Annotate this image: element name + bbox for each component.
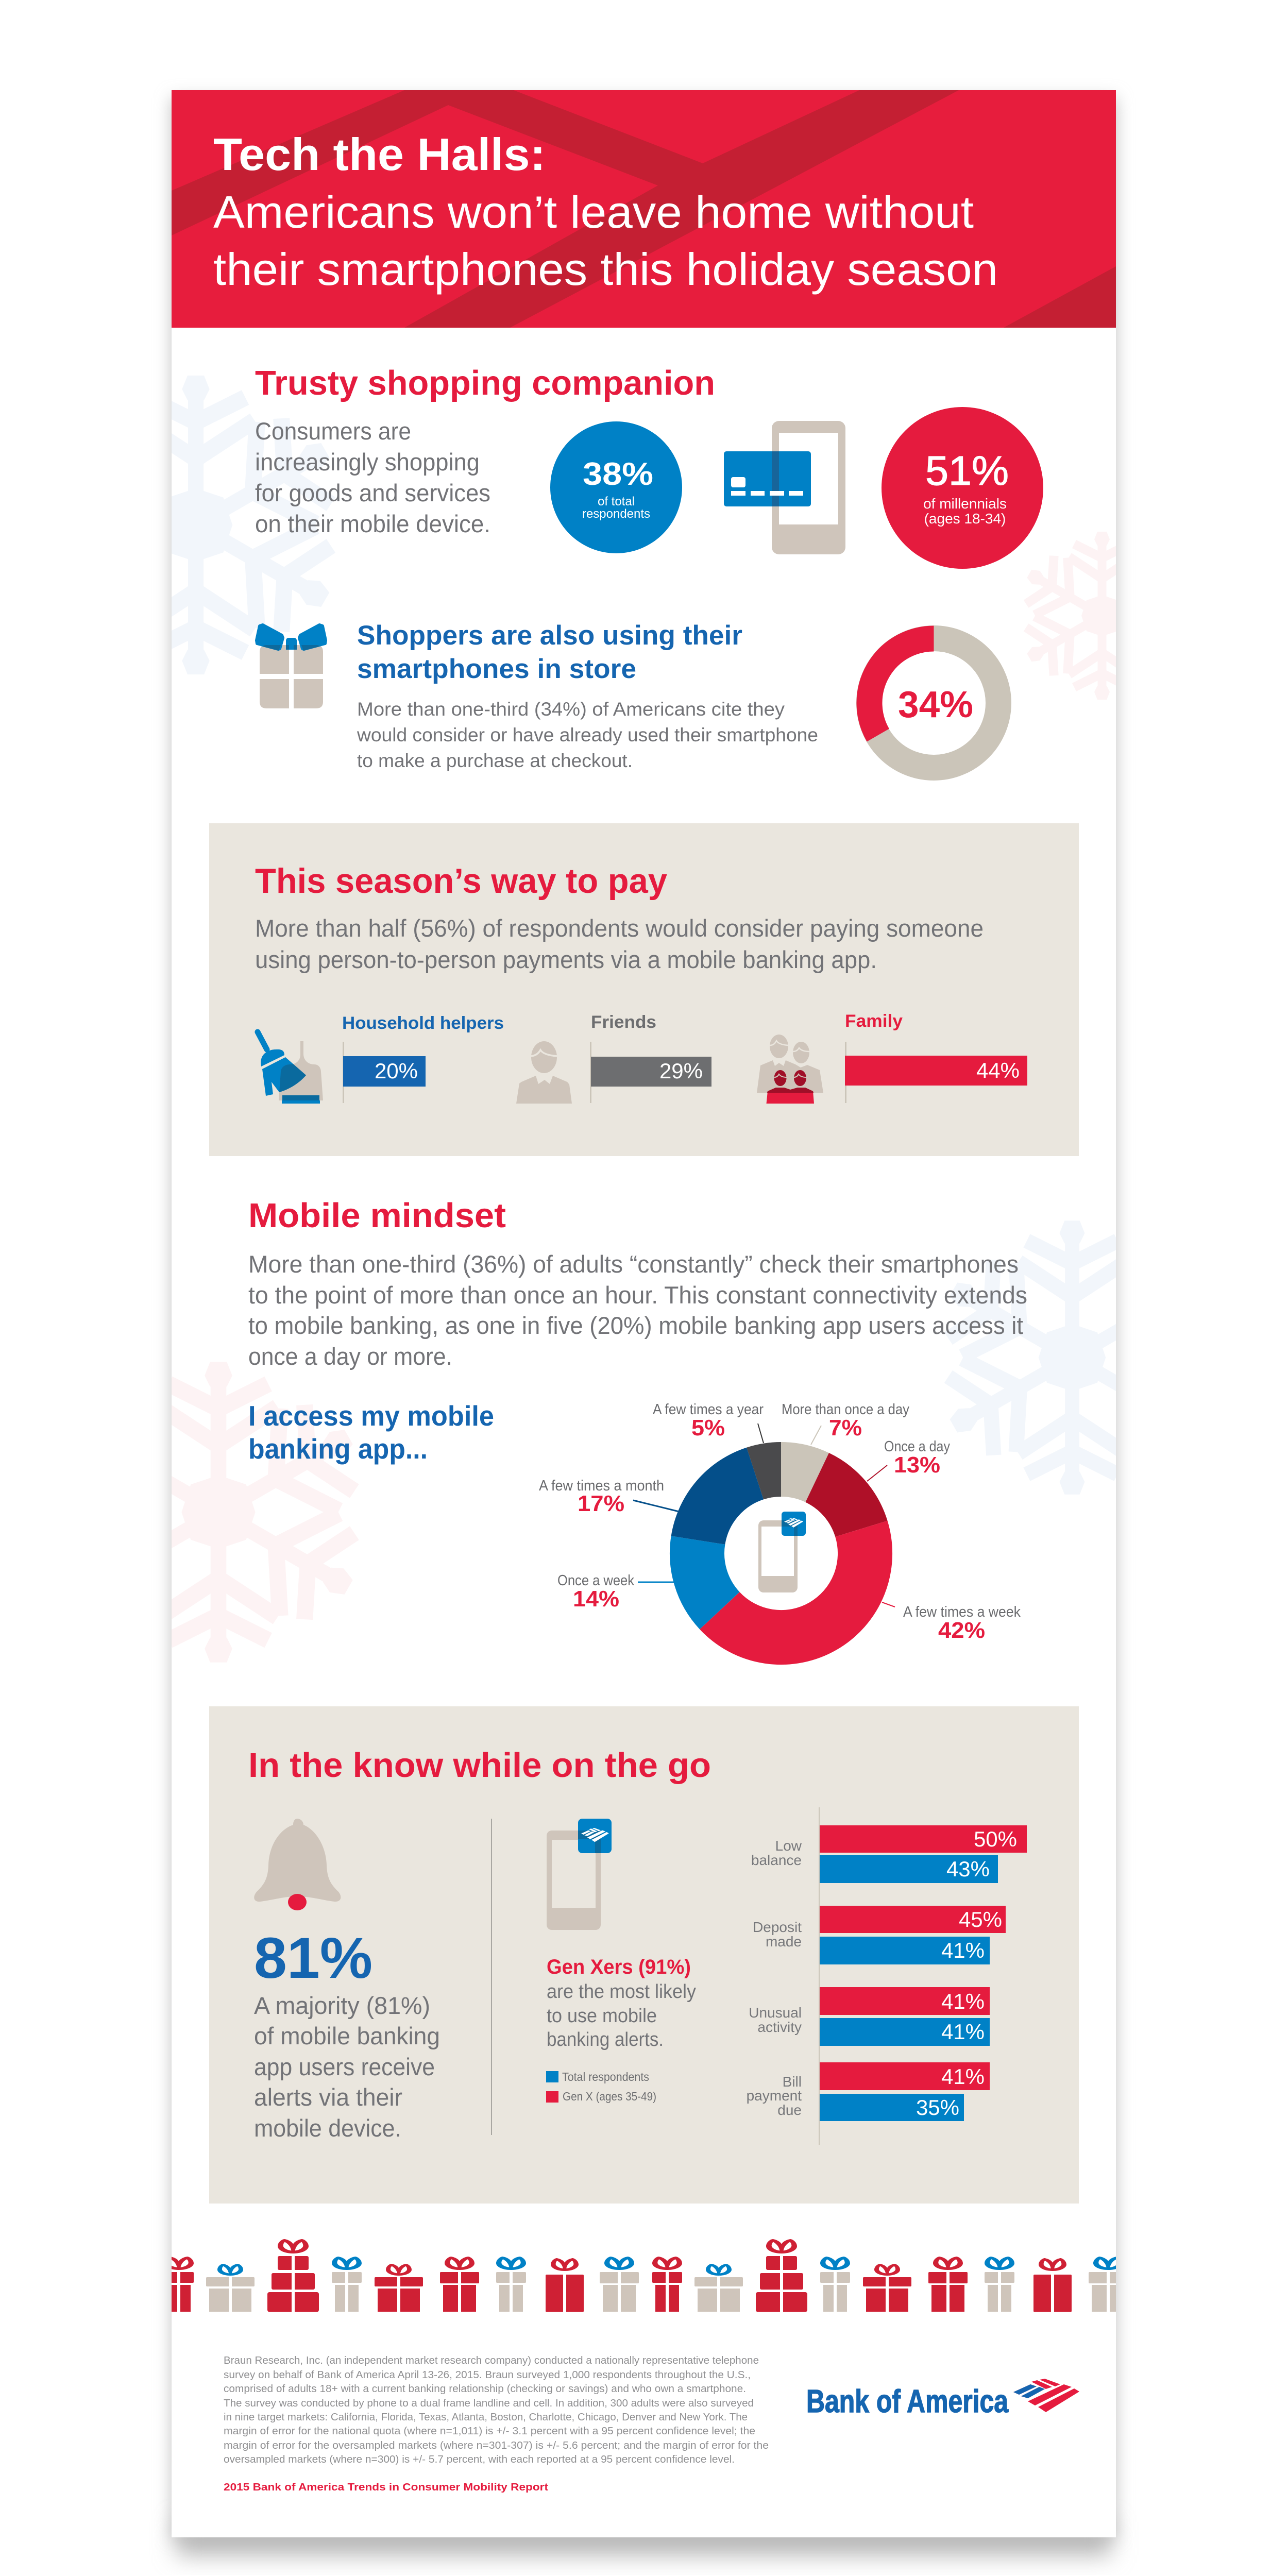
label: more than once a day 7%: More than once a day <box>782 1401 909 1418</box>
text: constantly check smartphones: once a day or more. <box>248 1343 452 1370</box>
bars: bill payment due: Bill <box>783 2074 802 2090</box>
bars: bill payment due: payment <box>747 2088 802 2104</box>
bars: unusual activity: activity <box>757 2019 802 2035</box>
heading: i access my mobile banking app: banking app... <box>248 1433 428 1465</box>
title: Tech the Halls: <box>213 129 546 180</box>
text: gen xers: to use mobile <box>547 2005 657 2027</box>
card drop shadow <box>172 98 1116 2555</box>
label: a few times a month 17%: A few times a month <box>539 1478 664 1494</box>
text: person-to-person payments: More than half (56%) of respondents would consider paying someone <box>255 914 984 942</box>
label: once a day 13% <box>867 1438 950 1481</box>
bars: bill payment due: 41% <box>941 2064 985 2089</box>
footnote: survey methodology: margin of error for the national quota (where n=1,011) is +/- 3.1 percent with a 95 percent confidence level; the <box>224 2426 755 2437</box>
text: majority receive alerts <box>254 1992 440 2142</box>
heading: shoppers in store <box>357 620 742 684</box>
label: a few times a month 17%: 17% <box>578 1491 624 1516</box>
stat circle: 38% of total respondents: respondents <box>582 507 650 521</box>
text: consumers shopping on mobile: on their mobile device. <box>255 510 490 537</box>
bars: bill payment due: 35% <box>916 2095 959 2120</box>
report citation: 2015 Bank of America Trends in Consumer Mobility Report <box>224 2482 548 2493</box>
stat circle: 51% of millennials <box>882 407 1043 569</box>
bars: deposit made: 41% <box>941 1938 985 1962</box>
icon: broom and dustpan <box>258 1032 323 1104</box>
text: one-third at checkout: would consider or have already used their smartphone <box>357 724 818 745</box>
decorative snowflakes <box>37 376 1217 1663</box>
text: consumers shopping on mobile: Consumers are <box>255 417 411 445</box>
footnote: survey methodology: in nine target markets: California, Florida, Texas, Atlanta, Boston, Charlotte, Chicago, Denver and New York. The <box>224 2412 748 2423</box>
label: more than once a day 7%: 7% <box>829 1415 862 1440</box>
footnote: survey methodology: oversampled markets (where n=300) is +/- 5.7 percent, with each reported at a 95 percent confidence level. <box>224 2454 735 2465</box>
text: person-to-person payments <box>255 914 984 973</box>
stat circle: 51% of millennials: 51% <box>925 448 1009 494</box>
text: majority receive alerts: A majority (81%) <box>254 1992 430 2019</box>
footnote: survey methodology: survey on behalf of Bank of America April 13-26, 2015. Braun surveyed 1,000 respondents throughout the U.S., <box>224 2369 751 2381</box>
stat circle: 51% of millennials: (ages 18-34) <box>924 511 1006 527</box>
card background <box>172 90 1116 2537</box>
donut chart: 34% <box>869 638 998 768</box>
label: once a week 14%: Once a week <box>557 1572 634 1589</box>
label: a few times a year 5%: A few times a year <box>653 1401 764 1418</box>
label: a few times a year 5%: 5% <box>691 1415 725 1440</box>
footnote: survey methodology: margin of error for the oversampled markets (where n=301-307) is +/- 5.6 percent; and the margin of error for the <box>224 2440 769 2451</box>
footnote: survey methodology: The survey was conducted by phone to a dual frame landline and cell. In addition, 300 adults were also surveyed <box>224 2398 754 2409</box>
legend: Total respondents <box>562 2070 649 2083</box>
label: a few times a week 42%: 42% <box>938 1618 985 1643</box>
stat circle: 38% of total respondents: of total <box>598 495 635 509</box>
heading: way to pay: This season’s way to pay <box>255 861 667 901</box>
bars: low balance <box>751 1825 1027 1883</box>
bars: unusual activity: 41% <box>941 1989 985 2013</box>
donut chart: banking app access frequency <box>697 1469 865 1637</box>
label: more than once a day 7% <box>782 1401 909 1445</box>
bar: household helpers 20% <box>342 1013 504 1103</box>
icon: bell <box>254 1819 341 1910</box>
bars: deposit made: 45% <box>959 1907 1002 1931</box>
text: majority receive alerts: app users receive <box>254 2053 435 2080</box>
bars: low balance: 50% <box>974 1827 1017 1851</box>
bars: deposit made: made <box>766 1934 802 1950</box>
bar: household helpers 20%: 20% <box>375 1059 418 1083</box>
bar: family 44% <box>845 1011 1027 1103</box>
stat circle: 38% of total respondents: 38% <box>583 456 653 492</box>
heading: shoppers in store: smartphones in store <box>357 654 636 684</box>
title <box>213 129 998 295</box>
bars: deposit made: Deposit <box>753 1919 802 1935</box>
stat circle: 38% of total respondents <box>550 421 682 553</box>
icon: family <box>757 1035 823 1104</box>
label: once a week 14% <box>557 1572 675 1612</box>
legend: Gen X (ages 35-49) <box>563 2090 656 2103</box>
icon: phone with banking app <box>547 1819 612 1930</box>
bars: deposit made <box>753 1906 1006 1964</box>
heading: shoppers in store: Shoppers are also using their <box>357 620 742 651</box>
footnote: survey methodology <box>224 2355 769 2465</box>
label: a few times a week 42% <box>882 1602 1021 1643</box>
icon: person <box>516 1041 572 1104</box>
legend <box>546 2070 656 2103</box>
text: majority receive alerts: of mobile banking <box>254 2022 440 2049</box>
bar: friends 29% <box>590 1012 711 1103</box>
bars: unusual activity: Unusual <box>749 2005 802 2021</box>
title: Americans won’t leave home without <box>213 187 974 238</box>
text: constantly check smartphones: to the point of more than once an hour. This constant connectivity extends <box>248 1281 1027 1309</box>
text: majority receive alerts: alerts via their <box>254 2083 402 2111</box>
heading: i access my mobile banking app: I access my mobile <box>248 1400 494 1432</box>
text: gen xers: Gen Xers (91%) <box>547 1956 691 1978</box>
text: gen xers <box>547 1956 696 2050</box>
bar: family 44%: Family <box>845 1011 903 1031</box>
heading: in the know: In the know while on the go <box>248 1746 711 1785</box>
bars: low balance: Low <box>775 1838 802 1854</box>
donut chart: 34%: 34% <box>898 684 973 725</box>
bar: friends 29%: 29% <box>659 1059 703 1083</box>
label: a few times a month 17% <box>539 1478 679 1516</box>
heading: i access my mobile banking app <box>248 1400 494 1465</box>
text: consumers shopping on mobile <box>255 417 490 537</box>
icon: phone with credit card <box>724 421 845 554</box>
text: constantly check smartphones <box>248 1250 1027 1370</box>
stat circle: 51% of millennials: of millennials <box>923 496 1007 512</box>
bars: low balance: balance <box>751 1852 802 1868</box>
bars: bill payment due <box>747 2062 990 2121</box>
text: person-to-person payments: using person-to-person payments via a mobile banking app. <box>255 946 877 973</box>
heading: trusty shopping companion: Trusty shopping companion <box>255 364 715 402</box>
label: once a day 13%: Once a day <box>884 1438 950 1455</box>
text: consumers shopping on mobile: for goods and services <box>255 479 490 506</box>
icon: gift <box>257 625 326 708</box>
bars: unusual activity <box>749 1987 990 2046</box>
icon: phone with app <box>758 1512 806 1592</box>
label: once a day 13%: 13% <box>894 1452 940 1478</box>
text: gen xers: banking alerts. <box>547 2029 664 2050</box>
bars: low balance: 43% <box>946 1857 990 1881</box>
text: one-third at checkout: More than one-third (34%) of Americans cite they <box>357 699 785 720</box>
text: one-third at checkout <box>357 699 818 771</box>
bars: bill payment due: due <box>777 2102 802 2118</box>
text: constantly check smartphones: More than one-third (36%) of adults “constantly” check their smartphones <box>248 1250 1019 1278</box>
label: a few times a week 42%: A few times a week <box>903 1604 1021 1620</box>
text: one-third at checkout: to make a purchase at checkout. <box>357 750 633 771</box>
footnote: survey methodology: Braun Research, Inc. (an independent market research company) conducted a nationally representative telephone <box>224 2355 759 2366</box>
title: their smartphones this holiday season <box>213 244 998 295</box>
row of gift icons <box>164 2239 1128 2313</box>
text: majority receive alerts: mobile device. <box>254 2114 401 2142</box>
header banner <box>172 90 1116 328</box>
footnote: survey methodology: comprised of adults 18+ with a current banking relationship (checking or savings) and who own a smartphone. <box>224 2383 746 2395</box>
heading: mobile mindset: Mobile mindset <box>248 1196 506 1235</box>
label: once a week 14%: 14% <box>573 1586 619 1612</box>
bar: family 44%: 44% <box>976 1058 1020 1082</box>
text: constantly check smartphones: to mobile banking, as one in five (20%) mobile banking app users access it <box>248 1312 1023 1339</box>
logo: bank of america: Bank of America <box>806 2384 1008 2419</box>
text: consumers shopping on mobile: increasingly shopping <box>255 448 480 476</box>
bar: friends 29%: Friends <box>591 1012 656 1032</box>
panel: this season's way to pay <box>209 823 1079 1156</box>
infographic canvas <box>160 89 1127 2569</box>
text: gen xers: are the most likely <box>547 1981 696 2003</box>
bars: unusual activity: 41% <box>941 2020 985 2044</box>
label: a few times a year 5% <box>653 1401 764 1443</box>
panel: in the know while on the go <box>209 1706 1079 2204</box>
bar: household helpers 20%: Household helpers <box>342 1013 504 1033</box>
bar chart: alert types <box>747 1807 1027 2145</box>
stat: 81%: 81% <box>254 1926 372 1990</box>
